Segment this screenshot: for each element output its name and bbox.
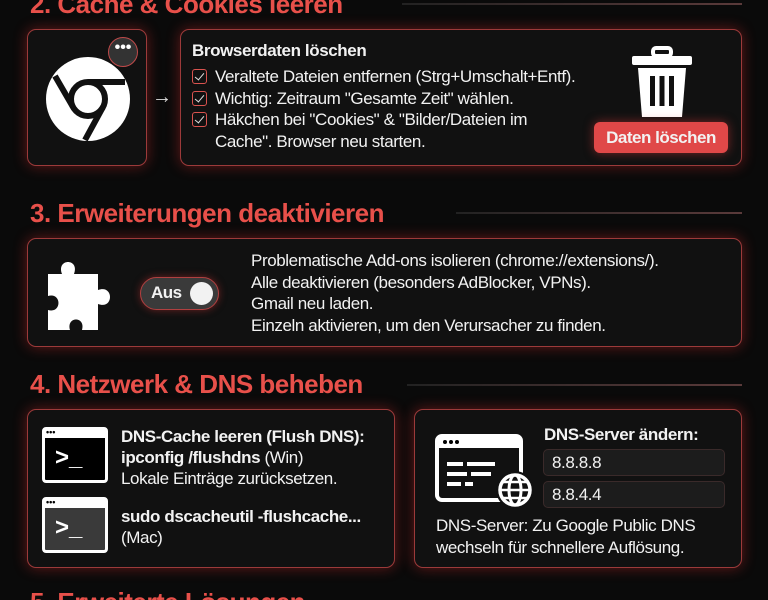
icon: terminal 2: >_ [55,514,82,541]
icon: puzzle [48,262,110,330]
text: extension steps [251,251,659,334]
text: extension steps: Alle deaktivieren (besonders AdBlocker, VPNs). [251,272,591,292]
text: extension steps: Einzeln aktivieren, um den Verursacher zu finden. [251,316,606,334]
toggle: Aus [140,277,219,310]
text: DNS explanation: DNS-Server: Zu Google Public DNS [436,516,695,535]
icon: terminal 2 [42,497,108,553]
icon: terminal 1: >_ [55,444,82,471]
text: DNS explanation [436,516,695,556]
checklist: Wichtig: Zeitraum "Gesamte Zeit" wählen. [215,88,513,108]
input: 8.8.8.8: 8.8.8.8 [552,453,601,472]
checklist [192,67,575,150]
text: flush dns win: ipconfig /flushdns (Win) [121,448,303,467]
panel: DNS cache [27,409,395,568]
checklist: Cache". Browser neu starten. [215,132,425,150]
icon: trash [632,46,692,117]
panel: browser icon [27,29,147,166]
checklist: Häkchen bei "Cookies" & "Bilder/Dateien im [215,110,527,129]
icon: terminal 1: ••• [46,427,55,437]
text: extension steps: Problematische Add-ons isolieren (chrome://extensions/). [251,251,659,270]
icon: menu dots: ••• [115,39,131,56]
text: DNS explanation: wechseln für schnellere Auflösung. [436,538,684,556]
button: Daten löschen: Daten löschen [606,128,716,147]
button: Daten löschen [594,122,728,153]
heading: 4. Netzwerk & DNS beheben: 4. Netzwerk & DNS beheben [30,369,363,399]
heading: 3. Erweiterungen deaktivieren: 3. Erweiterungen deaktivieren [30,198,384,228]
text: flush mac [121,507,361,547]
panel: Erweiterungen [27,238,742,347]
panel: Browserdaten löschen [180,29,742,166]
input: 8.8.4.4: 8.8.4.4 [552,485,601,504]
heading: Browserdaten löschen: Browserdaten löschen [192,41,366,60]
input: 8.8.4.4 [543,481,725,508]
icon: menu dots [108,37,138,67]
text: flush dns win [121,427,364,488]
text: flush dns win: DNS-Cache leeren (Flush DNS): [121,427,364,446]
icon: terminal 1 [42,427,108,483]
icon: chrome logo [46,57,130,141]
heading: DNS-Server ändern: DNS-Server ändern: [544,425,698,444]
text: extension steps: Gmail neu laden. [251,294,373,313]
arrow: → [152,86,172,108]
panel: DNS server [414,409,742,568]
icon: terminal 2: ••• [46,497,55,507]
text: flush mac: sudo dscacheutil -flushcache... [121,507,361,526]
toggle: Aus: Aus [151,283,182,302]
text: flush mac: (Mac) [121,528,162,547]
text: flush dns win: Lokale Einträge zurücksetzen. [121,469,337,488]
icon: browser with globe [435,434,532,507]
input: 8.8.8.8 [543,449,725,476]
checklist: Veraltete Dateien entfernen (Strg+Umschalt+Entf). [215,67,575,86]
